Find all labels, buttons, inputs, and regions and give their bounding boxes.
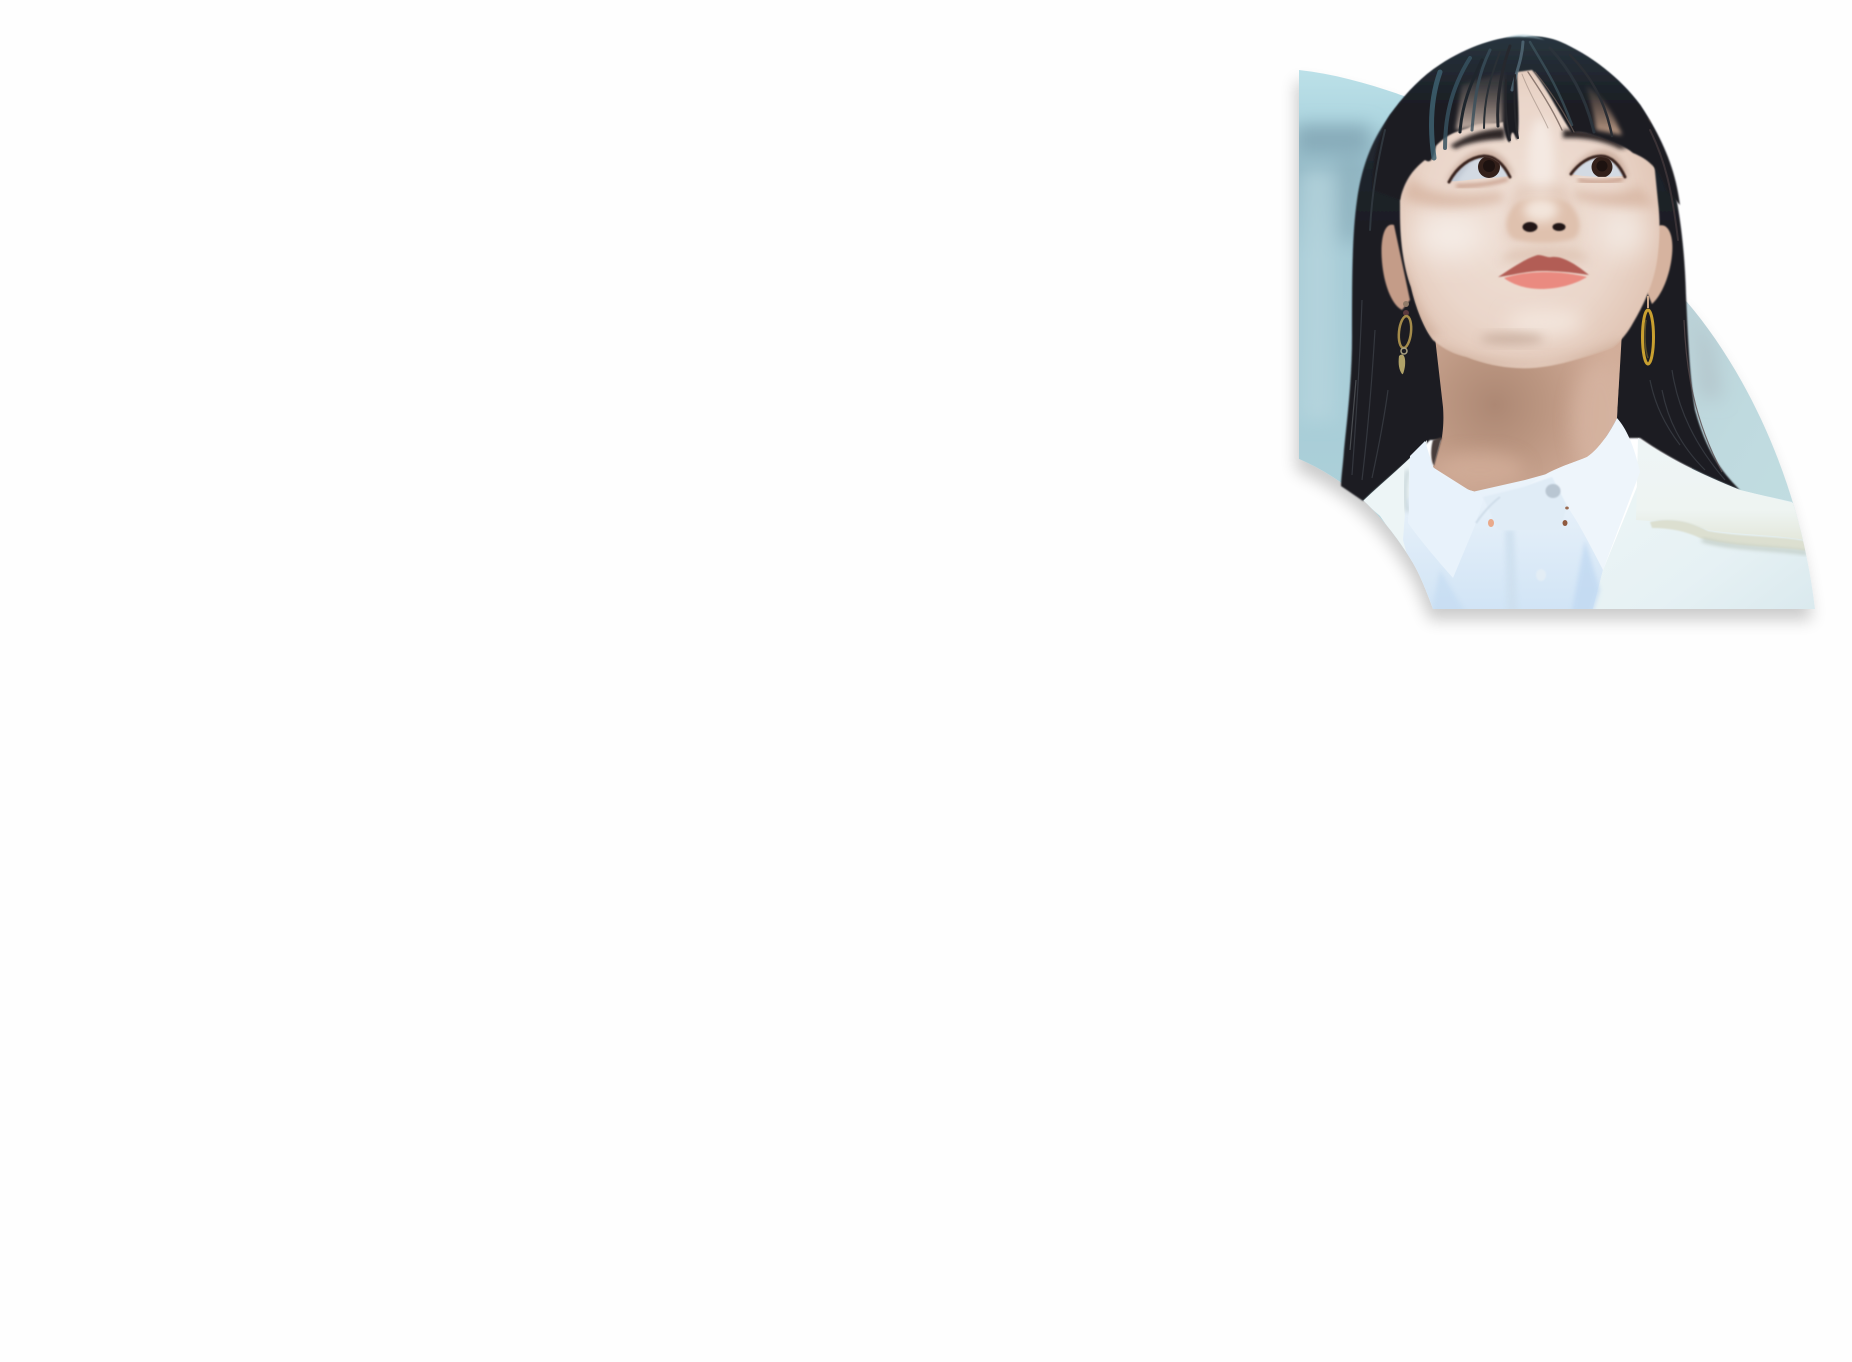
portrait illustration xyxy=(1288,34,1818,628)
earring left xyxy=(1397,301,1413,374)
coat: left panel xyxy=(1364,440,1427,560)
shirt collar left xyxy=(1410,441,1474,578)
nose xyxy=(1507,198,1579,243)
coat collar flap xyxy=(1636,438,1804,540)
buttons xyxy=(1488,484,1569,581)
neck xyxy=(1433,338,1622,492)
coat: right panel xyxy=(1593,464,1815,609)
eyes xyxy=(1446,150,1628,190)
earring right xyxy=(1642,296,1654,364)
soft frame shadow xyxy=(1296,81,1812,620)
eyebrows xyxy=(1450,128,1628,149)
clothing xyxy=(1363,418,1830,620)
sky behind right hair xyxy=(1686,301,1799,524)
ears xyxy=(1382,225,1672,310)
shirt collar right xyxy=(1546,418,1638,570)
hair back xyxy=(1341,37,1740,501)
face xyxy=(1396,60,1660,370)
fringe xyxy=(1370,34,1680,240)
shirt body xyxy=(1403,468,1603,609)
lips xyxy=(1498,255,1589,289)
curved photo frame background xyxy=(1299,70,1798,608)
